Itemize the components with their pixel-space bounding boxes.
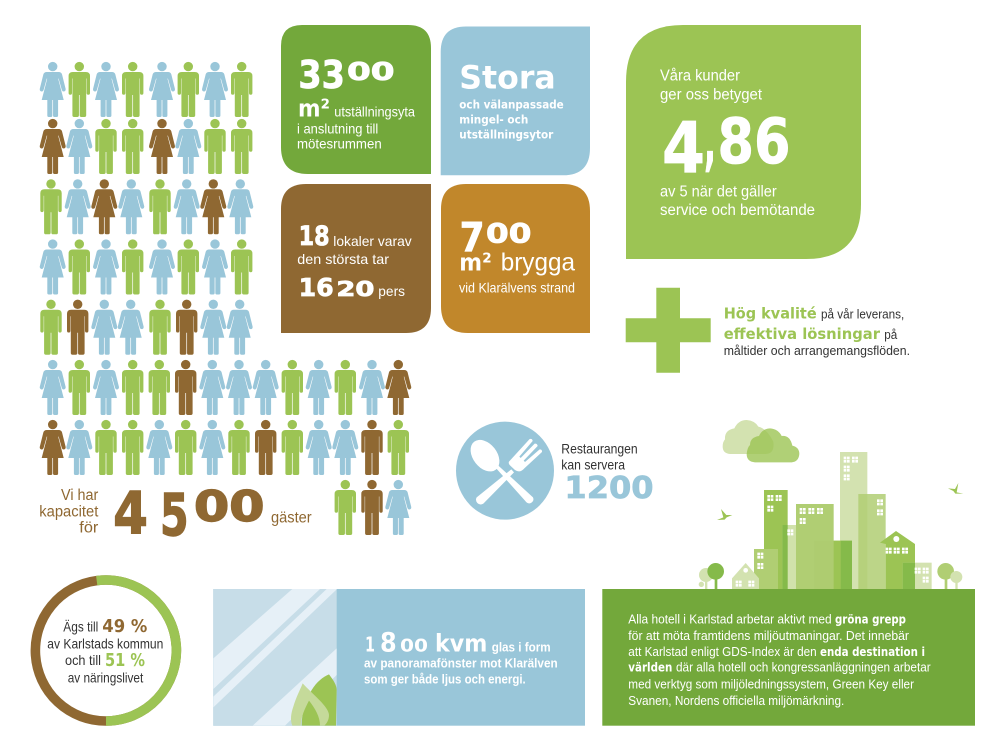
capacity text: 4 500 guests [39, 479, 312, 549]
row 4 [40, 239, 252, 294]
panel: 18 rooms [281, 184, 431, 333]
panel: green initiatives: gröna grepp [835, 613, 906, 627]
row 3 [40, 179, 253, 234]
panel: 1800 sqm glass [213, 589, 585, 726]
panel: customer rating 4,86: 86 [718, 105, 790, 178]
windows [736, 457, 929, 587]
icon: plus sign [626, 288, 711, 373]
capacity text: 4 500 guests: kapacitet [39, 504, 99, 521]
panel: green initiatives: med verktyg som miljöledningssystem, Green Key eller [628, 676, 915, 691]
panel: green initiatives: Svanen, Nordens officiella miljömärkning. [628, 693, 844, 708]
panel: customer rating 4,86: service och bemötande [660, 202, 815, 219]
panel: customer rating 4,86: Våra kunder [660, 68, 740, 85]
chart: ownership ring [35, 580, 176, 721]
illustration: green city [699, 420, 963, 589]
panel: green initiatives: för att möta framtidens miljöutmaningar. Det innebär [628, 628, 910, 643]
panel: customer rating 4,86: 4 [662, 108, 705, 190]
panel: customer rating 4,86: av 5 när det gäller [660, 184, 777, 201]
panel: 1800 sqm glass: glas i form [492, 641, 551, 655]
panel: 3300 m2 exhibition space: i anslutning till [297, 120, 378, 136]
panel: green initiatives: där alla hotell och kongressanläggningen arbetar [676, 660, 931, 675]
panel: large mingle spaces [441, 26, 590, 175]
panel: 18 rooms: lokaler varav [333, 233, 412, 249]
panel: 1800 sqm glass: som ger både ljus och energi. [364, 672, 526, 686]
panel: customer rating 4,86: ger oss betyget [660, 86, 763, 103]
row 2 [40, 119, 252, 174]
panel: 700 m2 pier: vid Klarälvens strand [459, 280, 575, 296]
panel: green initiatives: världen [628, 661, 672, 675]
text: restaurant capacity 1200: kan servera [561, 456, 625, 472]
panel: 3300 m2 exhibition space: 00 [347, 57, 395, 86]
panel: large mingle spaces: Stora [459, 58, 556, 96]
panel: large mingle spaces: mingel- och [459, 113, 528, 127]
buildings [732, 452, 932, 589]
panel: 18 rooms: den största tar [297, 251, 389, 267]
panel: 700 m2 pier: m² [459, 249, 492, 277]
panel: 18 rooms: pers [378, 283, 405, 299]
panel: green initiatives: att Karlstad enligt GDS-Index är den [628, 644, 817, 659]
panel: 18 rooms: 18 [299, 221, 330, 252]
panel: green initiatives [602, 589, 975, 726]
panel: 18 rooms: 16 [299, 273, 334, 302]
clouds [723, 420, 799, 462]
text: quality statement: på [884, 327, 898, 342]
panel: 700 m2 pier: 7 [460, 215, 485, 261]
capacity text: 4 500 guests: gäster [271, 510, 312, 527]
panel: 3300 m2 exhibition space: m² [298, 95, 330, 123]
panel: 3300 m2 exhibition space [281, 25, 431, 174]
text: restaurant capacity 1200 [561, 440, 654, 506]
row 1 [40, 62, 252, 117]
row 8 [335, 480, 411, 535]
panel: 3300 m2 exhibition space: mötesrummen [297, 135, 382, 151]
illustration: window glass with leaf [213, 589, 337, 726]
icon: spoon and fork [456, 422, 554, 520]
panel: 700 m2 pier [441, 184, 590, 333]
panel: 1800 sqm glass: 1 [365, 633, 375, 657]
text: quality statement [724, 304, 910, 358]
capacity text: 4 500 guests: Vi har [61, 487, 98, 504]
panel: 700 m2 pier: 00 [486, 219, 531, 250]
text: quality statement: Hög kvalité [724, 304, 817, 322]
chart: ownership ring: 51 % [105, 650, 145, 671]
panel: large mingle spaces: utställningsytor [459, 128, 554, 142]
chart: ownership ring: av Karlstads kommun [47, 635, 163, 651]
text: restaurant capacity 1200: Restaurangen [561, 440, 638, 456]
capacity text: 4 500 guests: för [79, 519, 98, 536]
panel: customer rating 4,86 [626, 25, 861, 259]
panel: 700 m2 pier: brygga [501, 249, 575, 277]
text: restaurant capacity 1200: 1200 [564, 471, 654, 506]
panel: 18 rooms: 20 [336, 277, 374, 301]
text: quality statement: effektiva lösningar [724, 325, 880, 343]
chart: ownership ring: och till [65, 652, 101, 668]
panel: green initiatives: Alla hotell i Karlstad arbetar aktivt med [628, 612, 832, 627]
capacity text: 4 500 guests: 5 [160, 481, 189, 549]
row 6 [40, 360, 411, 415]
panel: customer rating 4,86: , [704, 105, 716, 178]
panel: 3300 m2 exhibition space: utställningsyta [334, 104, 415, 120]
panel: large mingle spaces: och välanpassade [459, 98, 564, 112]
row 7 [40, 420, 409, 475]
panel: green initiatives: enda destination i [820, 645, 925, 659]
capacity text: 4 500 guests: 4 [113, 479, 148, 547]
text: quality statement: på vår leverans, [821, 306, 904, 321]
panel: 3300 m2 exhibition space: 33 [298, 53, 345, 97]
chart: ownership ring: av näringslivet [68, 669, 143, 685]
panel: 1800 sqm glass: 00 [400, 636, 428, 657]
text: quality statement: måltider och arrangemangsflöden. [724, 343, 910, 358]
people pictogram grid [40, 62, 411, 535]
row 5 [40, 300, 253, 355]
capacity text: 4 500 guests: 00 [194, 482, 264, 531]
trees [699, 563, 962, 589]
panel: 1800 sqm glass: kvm [435, 630, 487, 658]
panel: 1800 sqm glass: av panoramafönster mot Klarälven [364, 656, 558, 670]
birds [717, 483, 963, 520]
chart: ownership ring: Ägs till [63, 619, 98, 635]
panel: 1800 sqm glass: 8 [380, 628, 397, 659]
chart: ownership ring: 49 % [102, 616, 147, 637]
